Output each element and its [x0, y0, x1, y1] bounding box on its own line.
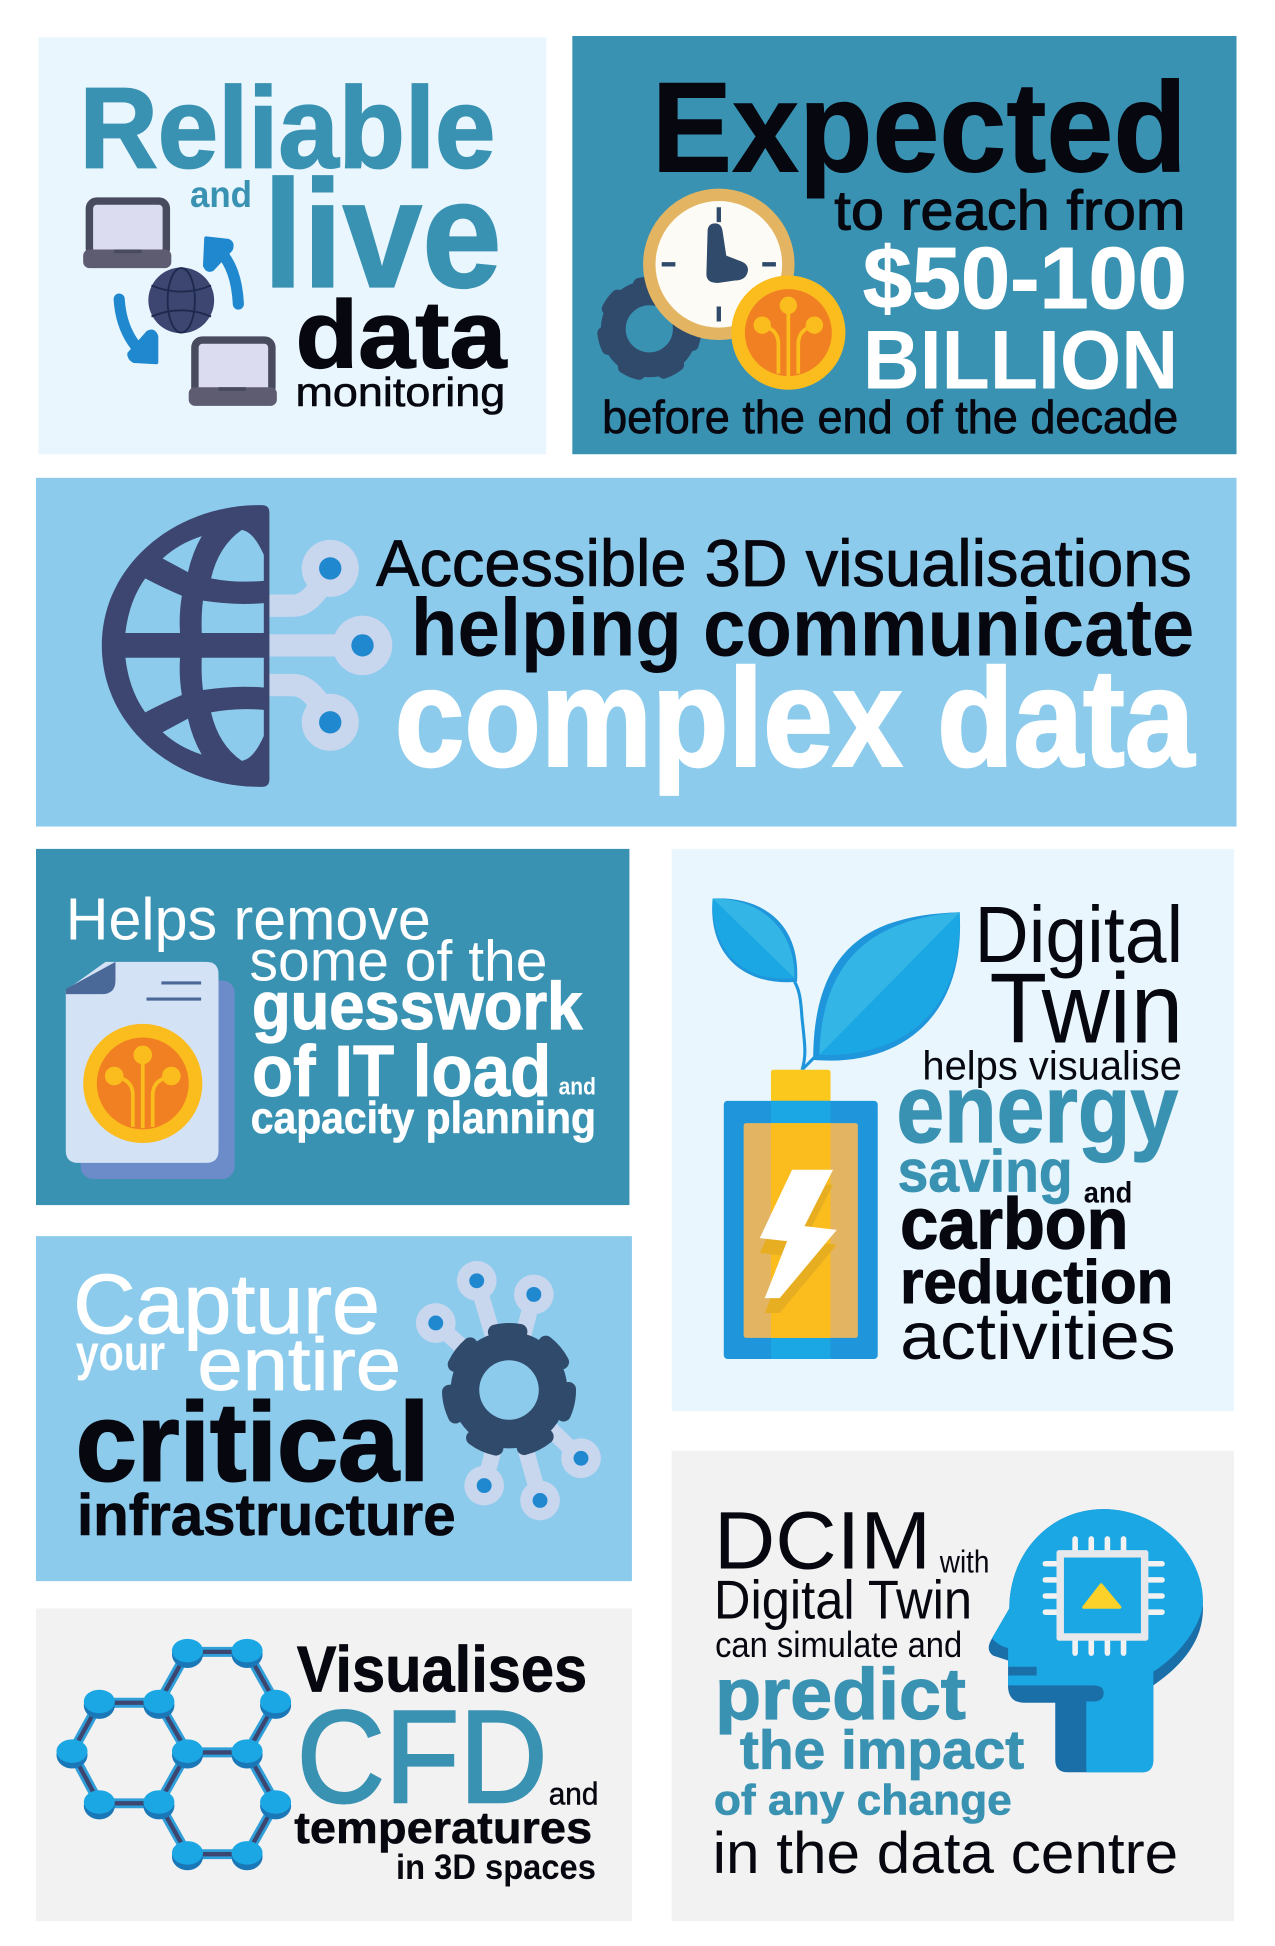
heading: digital twin helps visualise energy saving and carbon reduction	[896, 890, 1183, 1374]
heading: expected to reach 50-100 billion: $50-100	[863, 230, 1187, 327]
heading: reliable and live data monitoring	[79, 65, 507, 415]
icon: half globe with circuit connectors	[102, 505, 392, 787]
heading: accessible 3D visualisations helping communicate complex data: Accessible 3D visualisations	[376, 526, 1192, 600]
heading: helps remove guesswork: guesswork	[252, 969, 583, 1044]
icon: document with circuit coin	[66, 962, 235, 1179]
heading: capture your entire critical infrastructure: critical	[76, 1380, 430, 1505]
heading: DCIM predict the impact in the data centre: of any change	[714, 1776, 1012, 1823]
heading: helps remove guesswork: some of the	[250, 929, 547, 993]
heading: DCIM predict the impact in the data centre: DCIM	[714, 1496, 931, 1587]
icon: globe	[148, 267, 214, 333]
heading: capture your entire critical infrastructure: your	[76, 1325, 165, 1381]
heading: accessible 3D visualisations helping communicate complex data	[376, 526, 1196, 796]
heading: helps remove guesswork: capacity planning	[251, 1094, 596, 1143]
heading: accessible 3D visualisations helping communicate complex data: complex data	[395, 641, 1196, 796]
heading: expected to reach 50-100 billion: Expected	[652, 56, 1187, 199]
heading: DCIM predict the impact in the data centre: Digital Twin	[714, 1569, 972, 1630]
panel: accessible 3D visualisations	[36, 478, 1237, 827]
heading: visualises CFD and temperatures: Visualises	[297, 1634, 587, 1706]
icon: head with chip	[989, 1509, 1203, 1772]
panel: reliable and live data monitoring	[38, 37, 546, 454]
heading: reliable and live data monitoring: Reliable	[79, 65, 495, 193]
heading: helps remove guesswork: Helps remove	[66, 885, 431, 952]
heading: reliable and live data monitoring: data	[295, 281, 507, 388]
heading: reliable and live data monitoring: live	[263, 150, 502, 320]
heading: visualises CFD and temperatures: CFD	[297, 1683, 547, 1830]
heading: DCIM predict the impact in the data centre: can simulate and	[715, 1624, 962, 1665]
icon: arrow down	[119, 299, 156, 362]
heading: expected to reach 50-100 billion: to reach from	[834, 179, 1186, 242]
panel: capture critical infrastructure	[36, 1236, 632, 1581]
heading: helps remove guesswork	[66, 886, 596, 1143]
panel: visualises CFD	[36, 1608, 632, 1921]
heading: digital twin helps visualise energy saving and carbon reduction: reduction	[900, 1248, 1173, 1316]
heading: expected to reach 50-100 billion: before the end of the decade	[602, 391, 1178, 443]
icon: circuit coin	[731, 276, 845, 390]
icon: battery with leaves	[712, 898, 960, 1359]
heading: capture your entire critical infrastructure: infrastructure	[77, 1483, 456, 1548]
panel: guesswork of IT load	[36, 849, 629, 1205]
heading: visualises CFD and temperatures: and	[549, 1777, 598, 1812]
heading: capture your entire critical infrastructure: Capture	[73, 1257, 380, 1351]
icon: arrow up	[205, 238, 238, 304]
heading: visualises CFD and temperatures: in 3D spaces	[396, 1849, 596, 1887]
heading: digital twin helps visualise energy saving and carbon reduction: carbon	[900, 1185, 1129, 1265]
icon: clock	[643, 189, 795, 340]
icon: gear	[603, 283, 695, 375]
panel: digital twin energy saving	[672, 849, 1234, 1411]
icon: laptop top	[83, 197, 171, 268]
icon: microchip	[1045, 1539, 1162, 1653]
heading: digital twin helps visualise energy saving and carbon reduction: Twin	[989, 954, 1183, 1064]
heading: reliable and live data monitoring: and	[190, 173, 252, 215]
heading: DCIM predict the impact in the data centre: in the data centre	[713, 1821, 1178, 1886]
heading: digital twin helps visualise energy saving and carbon reduction: helps visualise	[922, 1043, 1182, 1089]
heading: DCIM predict the impact in the data centre	[713, 1496, 1178, 1886]
heading: digital twin helps visualise energy saving and carbon reduction: Digital	[975, 890, 1183, 979]
panel: DCIM with digital twin	[672, 1451, 1234, 1921]
heading: visualises CFD and temperatures: temperatures	[294, 1804, 592, 1853]
heading: digital twin helps visualise energy saving and carbon reduction: energy	[896, 1054, 1178, 1163]
heading: digital twin helps visualise energy saving and carbon reduction: saving	[898, 1137, 1073, 1204]
heading: expected to reach 50-100 billion	[602, 56, 1187, 443]
heading: capture your entire critical infrastructure: entire	[197, 1323, 401, 1406]
heading: accessible 3D visualisations helping communicate complex data: helping communicate	[411, 582, 1194, 673]
icon: laptop bottom	[189, 336, 277, 406]
panel: expected market growth	[572, 36, 1237, 454]
heading: reliable and live data monitoring: monitoring	[295, 369, 505, 415]
heading: expected to reach 50-100 billion: BILLION	[863, 313, 1178, 406]
heading: DCIM predict the impact in the data centre: with	[939, 1544, 989, 1579]
icon: gear with circuit nodes	[416, 1261, 601, 1520]
heading: digital twin helps visualise energy saving and carbon reduction: activities	[900, 1299, 1176, 1374]
heading: DCIM predict the impact in the data centre: the impact	[740, 1720, 1024, 1781]
heading: helps remove guesswork: and	[559, 1074, 596, 1100]
heading: helps remove guesswork: of IT load	[252, 1032, 551, 1112]
heading: visualises CFD and temperatures	[294, 1634, 598, 1887]
heading: capture your entire critical infrastructure	[73, 1257, 456, 1548]
heading: digital twin helps visualise energy saving and carbon reduction: and	[1084, 1177, 1132, 1210]
heading: DCIM predict the impact in the data centre: predict	[715, 1655, 966, 1735]
icon: hexagon molecule	[56, 1639, 291, 1870]
